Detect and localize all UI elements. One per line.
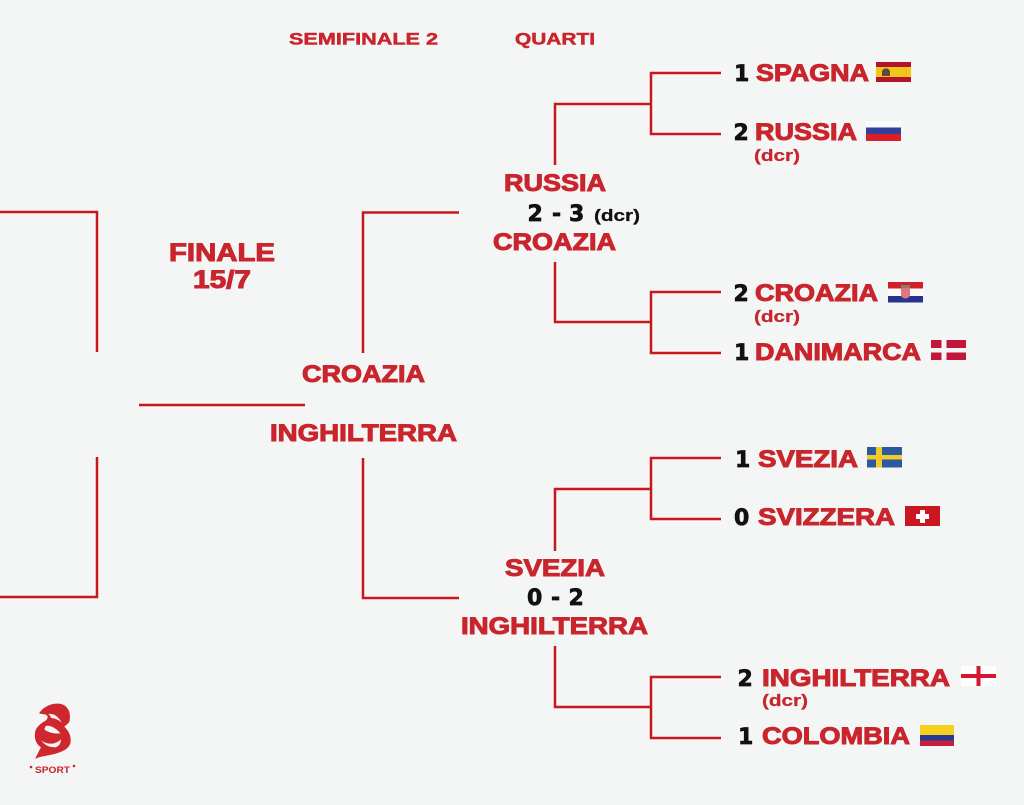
heading: quarti: QUARTI [515,30,595,48]
team row: colombia [738,723,954,750]
team row: svezia: 1 [735,448,750,473]
team row: russia: 2 [734,121,749,146]
bracket lines: quarter 1 and 2 [555,73,721,165]
team row: russia: RUSSIA [755,119,857,146]
quarter result: svezia inghilterra: INGHILTERRA [461,613,648,640]
quarter result: russia croazia: CROAZIA [493,229,616,256]
semifinal teams: croazia vs inghilterra: INGHILTERRA [270,420,457,447]
team row: croazia: CROAZIA [755,280,878,307]
team row: svizzera: SVIZZERA [758,504,895,531]
semifinal teams: croazia vs inghilterra [270,361,457,447]
team row: svezia: SVEZIA [758,446,858,473]
quarter result: russia croazia [493,170,640,256]
team row: colombia: COLOMBIA [762,723,910,750]
bracket lines: quarter 7 and 8 [555,646,721,738]
quarter result: svezia inghilterra: 0-2 [527,586,584,611]
team row: spagna: 1 [734,62,749,87]
team row: inghilterra: (dcr) [762,691,808,710]
bracket lines: left side [0,212,97,597]
quarter result: russia croazia: 2-3 [528,202,584,227]
icon: flag spain [876,62,911,82]
team row: russia [734,119,901,165]
team row: croazia: (dcr) [754,307,800,326]
quarter result: russia croazia: RUSSIA [504,170,606,197]
icon: flag england [961,666,996,686]
icon: flag sweden [867,447,902,468]
team row: svizzera [734,504,940,531]
team row: spagna [734,60,911,87]
team row: inghilterra: 2 [738,667,753,692]
team row: danimarca: 1 [734,341,749,366]
team row: russia: (dcr) [754,146,800,165]
team row: svizzera: 0 [734,506,749,531]
bracket lines: semifinal connectors [363,212,459,598]
bracket lines: quarter 3 and 4 [555,262,721,353]
bracket lines: quarter 5 and 6 [555,458,721,551]
team row: inghilterra: INGHILTERRA [762,665,950,692]
semifinal teams: croazia vs inghilterra: CROAZIA [302,361,425,388]
icon: flag russia [866,121,901,141]
team row: danimarca: DANIMARCA [755,339,921,366]
team row: svezia [735,446,902,473]
quarter result: russia croazia: (dcr) [594,206,640,225]
icon: flag croatia [888,282,923,302]
team row: spagna: SPAGNA [756,60,869,87]
icon: flag colombia [920,725,954,746]
team row: colombia: 1 [738,725,753,750]
team row: croazia [734,280,923,326]
team row: danimarca [734,339,966,366]
icon: flag switzerland [905,506,940,526]
quarter result: svezia inghilterra: SVEZIA [505,555,605,582]
team row: croazia: 2 [734,282,749,307]
icon: flag denmark [931,340,966,360]
heading: semifinale 2: SEMIFINALE 2 [289,30,438,48]
heading: finale date: 15/7 [193,266,251,294]
heading: finale date: FINALE [169,239,275,267]
bracket line: final connector [139,404,305,406]
team row: inghilterra [738,665,996,710]
logo: sport [30,704,75,776]
logo: sport: SPORT [35,765,70,776]
quarter result: svezia inghilterra [461,555,648,640]
heading: finale date [169,239,275,294]
